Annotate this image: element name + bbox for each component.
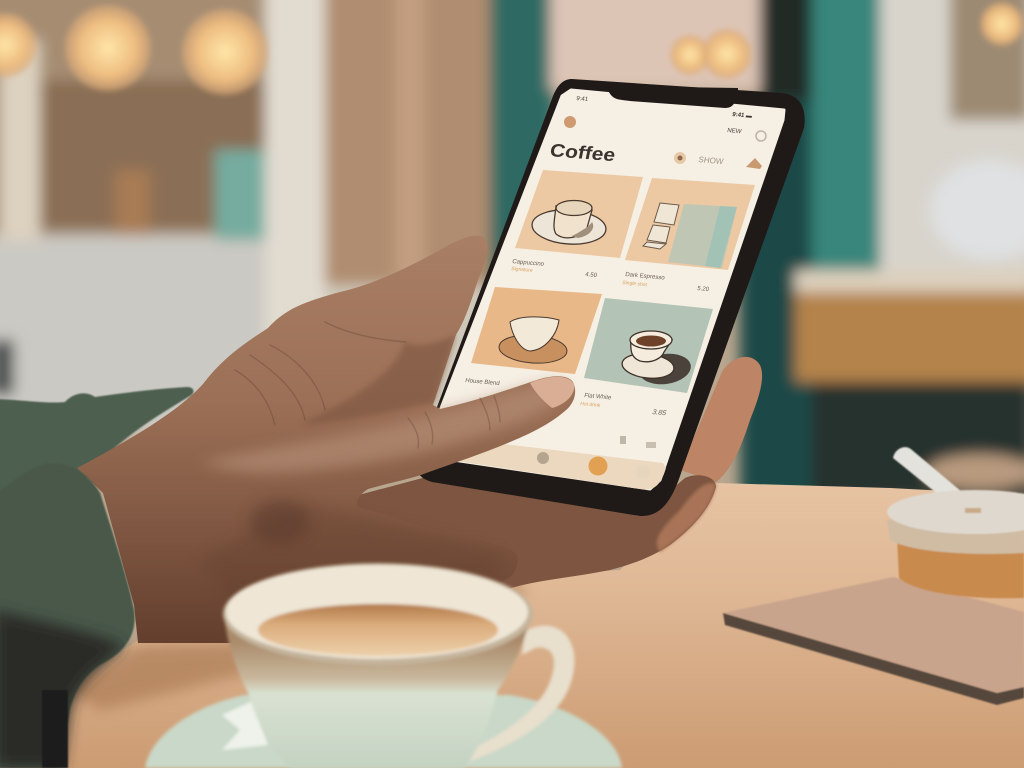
knuckle wrinkles <box>235 322 500 448</box>
card 1: cup on saucer <box>515 170 643 258</box>
tab icons <box>537 436 656 479</box>
small header icons and text: NEW <box>727 128 742 135</box>
card 1 and 2 labels <box>511 259 710 293</box>
card 1 and 2 labels: 5.20 <box>697 286 710 293</box>
saucer highlight <box>222 700 268 750</box>
card 1 and 2 labels: Signature <box>511 266 533 274</box>
card 2: book <box>625 178 755 270</box>
small header icons and text: 9:41 <box>576 96 589 103</box>
sleeve dark lower shadow <box>0 610 125 768</box>
notebook <box>723 577 1024 705</box>
card 3 and 4 labels <box>465 378 667 417</box>
card 3 and 4 labels: 3.85 <box>652 408 667 417</box>
wooden table <box>60 483 1024 768</box>
saucer <box>145 695 622 768</box>
card 3 and 4 labels: House Blend <box>465 378 500 387</box>
back hand fingers behind phone <box>340 357 762 590</box>
main hand with thumb and index finger <box>77 236 575 643</box>
card 1 and 2 labels: Single shot <box>622 280 648 288</box>
phone screen <box>426 86 784 490</box>
small jar with spoon <box>887 447 1024 598</box>
coffee cup <box>223 563 574 768</box>
card 1 and 2 labels: Cappuccino <box>512 259 545 268</box>
fingernail <box>530 377 574 408</box>
small header icons and text <box>564 96 766 169</box>
card 3: tan cup <box>471 287 602 374</box>
phone body <box>417 79 805 516</box>
far sleeve (upper arm) <box>0 387 194 510</box>
card 3 and 4 labels: Flat White <box>584 393 612 401</box>
card 4: green card with cup <box>584 298 713 393</box>
hanging lamps <box>0 2 1024 95</box>
notch <box>606 86 738 108</box>
index finger highlight <box>200 381 563 473</box>
table shadow under hand <box>68 582 530 710</box>
app title: Coffee <box>548 140 617 165</box>
hand shading <box>250 500 310 544</box>
card 3 and 4 labels: Hot drink <box>580 401 601 409</box>
card 1 and 2 labels: Dark Espresso <box>625 272 666 282</box>
small header icons and text: SHOW <box>698 155 725 166</box>
bottom tab bar <box>430 440 666 490</box>
small header icons and text: 9:41 ▬ <box>732 112 753 120</box>
card 1 and 2 labels: 4.50 <box>585 272 598 279</box>
green sleeve <box>0 463 135 768</box>
